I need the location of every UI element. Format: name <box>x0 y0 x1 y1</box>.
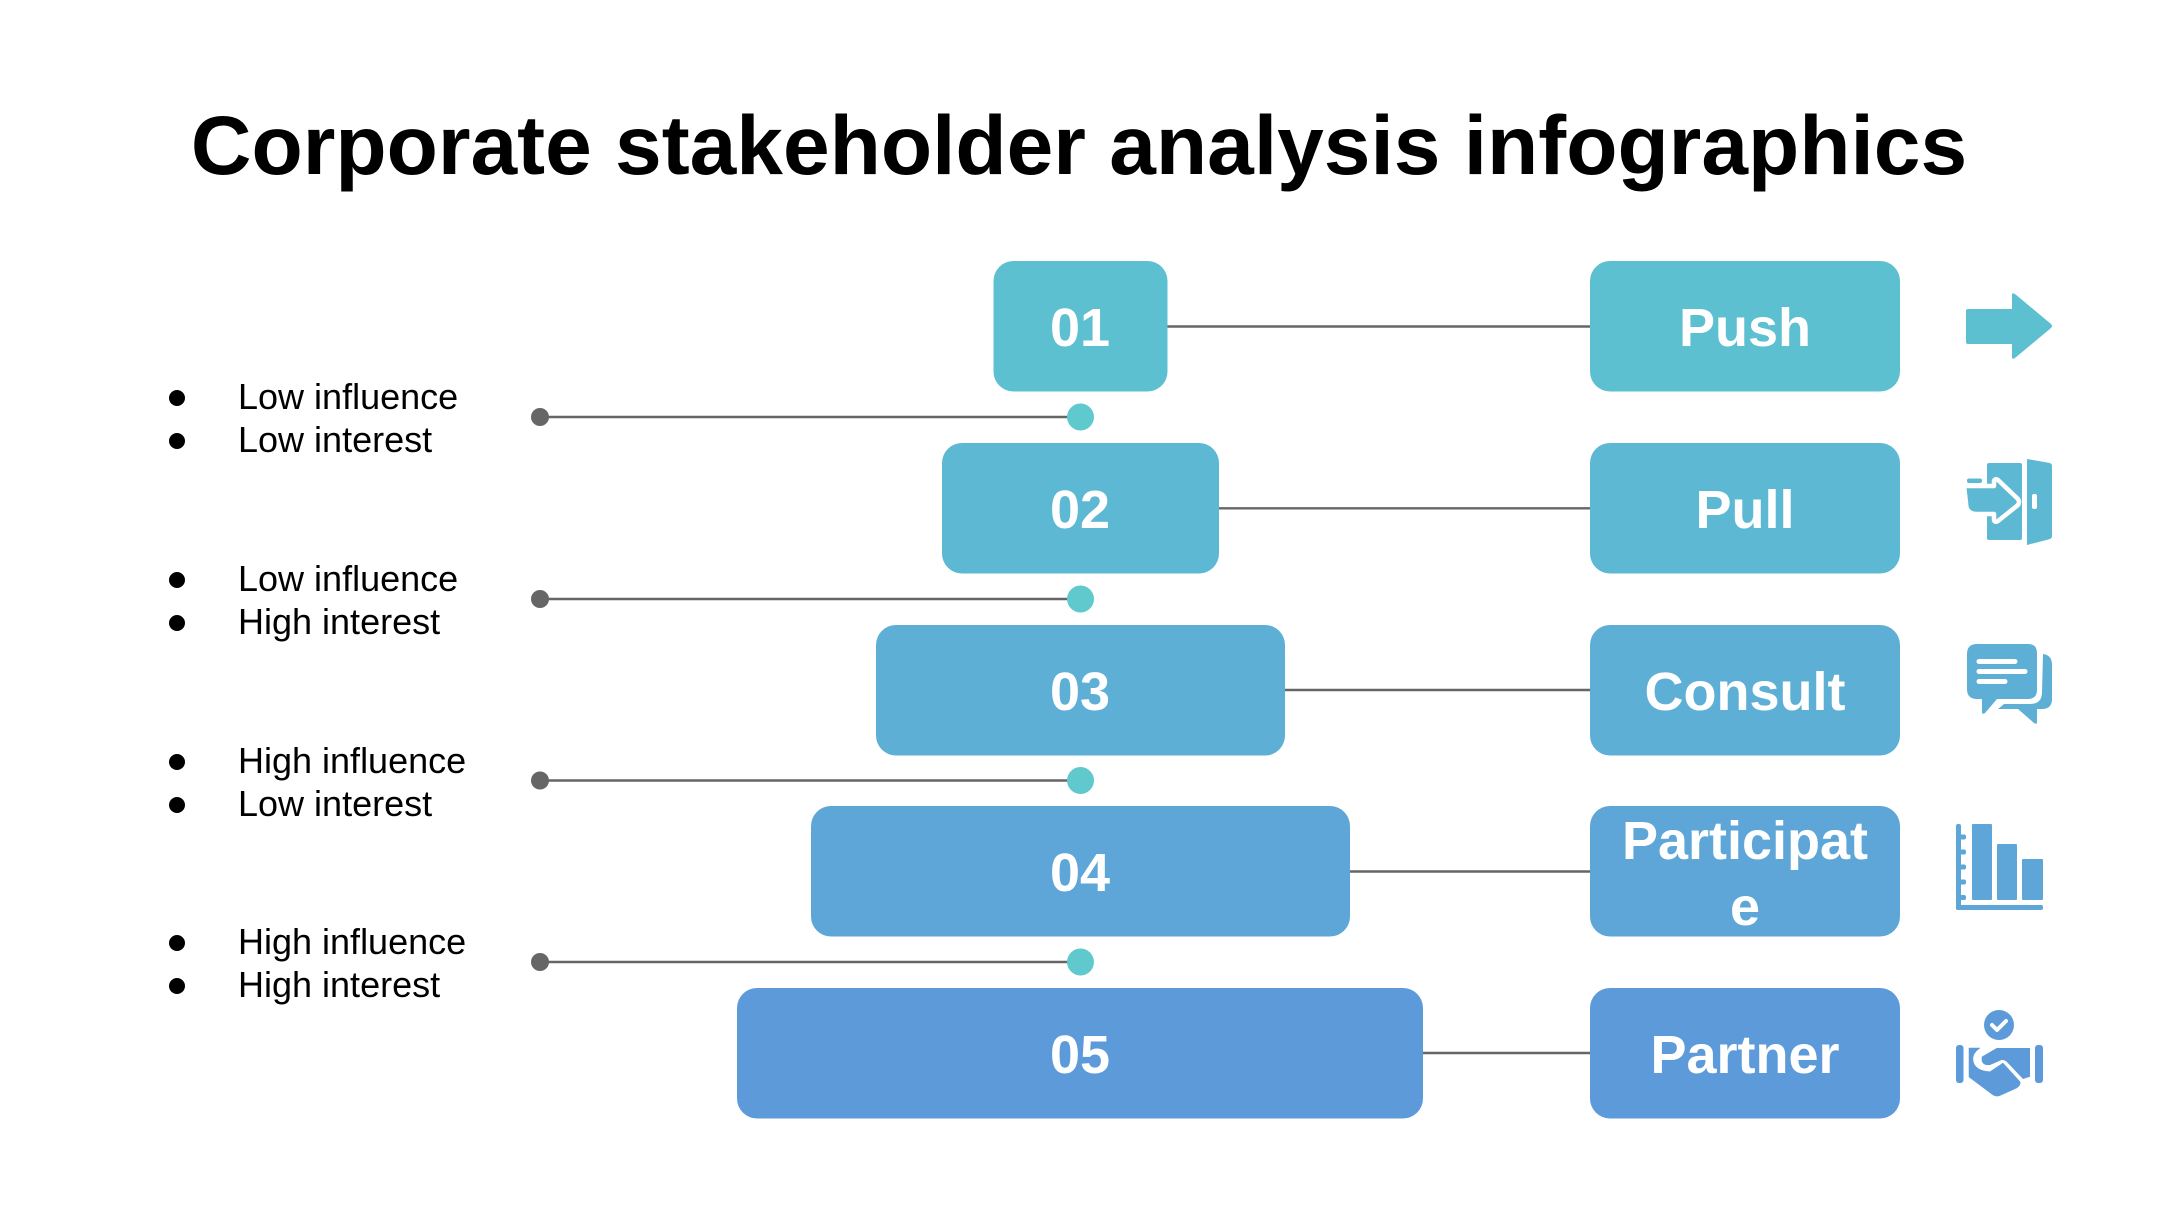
title: Corporate stakeholder analysis infographics <box>191 98 1967 192</box>
connector 4 <box>531 948 1094 976</box>
label box Partner: Partner <box>1650 1025 1840 1085</box>
text block: high influence, high interest: High influence <box>238 921 466 962</box>
text block: low influence, low interest <box>169 376 458 460</box>
icon: handshake <box>1956 1010 2043 1096</box>
connector 2 <box>531 586 1094 612</box>
label box Pull <box>1590 443 1900 574</box>
label box Pull: Pull <box>1695 480 1795 540</box>
number box 03: 03 <box>1050 662 1110 722</box>
row 2: Pull <box>942 443 2052 574</box>
number box 02: 02 <box>1050 480 1110 540</box>
text block: low influence, high interest <box>169 558 458 642</box>
text block: low influence, high interest: Low influence <box>238 558 458 599</box>
label box Push: Push <box>1679 298 1811 358</box>
number box 05 <box>737 988 1423 1118</box>
icon: bar chart <box>1956 824 2043 910</box>
row 5: Partner <box>737 988 2043 1118</box>
number box 01: 01 <box>1050 298 1110 358</box>
label box Push <box>1590 261 1900 392</box>
text block: high influence, low interest: Low interest <box>238 783 432 824</box>
text block: high influence, high interest: High interest <box>238 964 440 1005</box>
number box 04: 04 <box>1050 843 1110 903</box>
connector 3 <box>531 767 1094 794</box>
number box 01 <box>994 261 1168 392</box>
text block: high influence, high interest <box>169 921 466 1005</box>
icon: arrow <box>1966 293 2052 359</box>
number box 05: 05 <box>1050 1025 1110 1085</box>
label box Participate <box>1590 806 1900 937</box>
number box 03 <box>876 625 1285 756</box>
icon: door with arrow <box>1964 459 2052 545</box>
label box Partner <box>1590 988 1900 1118</box>
row 4: Participate <box>811 806 2043 937</box>
label box Participate: e <box>1730 877 1760 937</box>
connector 1 <box>531 404 1094 430</box>
text block: high influence, low interest: High influence <box>238 740 466 781</box>
label box Participate: Participat <box>1622 811 1868 871</box>
icon: chat bubbles <box>1967 644 2052 724</box>
row 1: Push <box>994 261 2052 392</box>
label box Consult <box>1590 625 1900 756</box>
number box 02 <box>942 443 1219 574</box>
text block: low influence, high interest: High interest <box>238 601 440 642</box>
label box Consult: Consult <box>1645 662 1845 722</box>
text block: low influence, low interest: Low influence <box>238 376 458 417</box>
text block: low influence, low interest: Low interest <box>238 419 432 460</box>
text block: high influence, low interest <box>169 740 466 824</box>
number box 04 <box>811 806 1350 936</box>
row 3: Consult <box>876 625 2052 756</box>
